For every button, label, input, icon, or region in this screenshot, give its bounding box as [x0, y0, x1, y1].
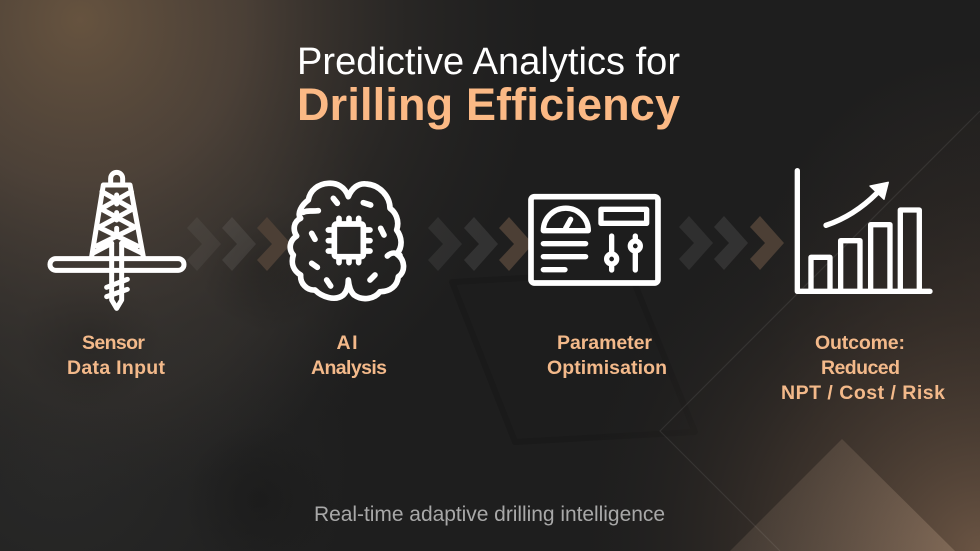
icon: drilling derrick [50, 172, 184, 308]
label: outcome: Outcome: [815, 332, 905, 354]
label: outcome: NPT / Cost / Risk [781, 382, 945, 404]
label: sensor data input: Sensor [82, 332, 145, 354]
arrow: chevrons between AI and parameters [428, 217, 533, 271]
label: outcome [781, 332, 945, 404]
label: AI analysis [311, 332, 387, 379]
icon: bar chart with rising arrow [797, 171, 930, 291]
tagline: Real-time adaptive drilling intelligence [314, 503, 665, 526]
title line 2: Drilling Efficiency [297, 79, 680, 130]
arrow: chevrons between parameters and outcome [679, 216, 784, 270]
label: AI analysis: AI [336, 332, 358, 354]
label: outcome: Reduced [821, 357, 900, 379]
arrow: chevrons between sensor and AI [187, 217, 291, 271]
label: AI analysis: Analysis [311, 357, 387, 379]
icon: control panel [531, 197, 658, 283]
decorative filled diamond [730, 439, 955, 551]
label: parameter optimisation: Parameter [557, 332, 652, 354]
label: parameter optimisation [547, 332, 667, 379]
label: sensor data input [67, 332, 166, 379]
title [297, 41, 680, 130]
decorative diamond outline [660, 111, 980, 551]
label: sensor data input: Data Input [67, 357, 166, 379]
label: parameter optimisation: Optimisation [547, 357, 667, 379]
icon: brain with chip [290, 183, 404, 299]
title line 1: Predictive Analytics for [297, 41, 680, 83]
